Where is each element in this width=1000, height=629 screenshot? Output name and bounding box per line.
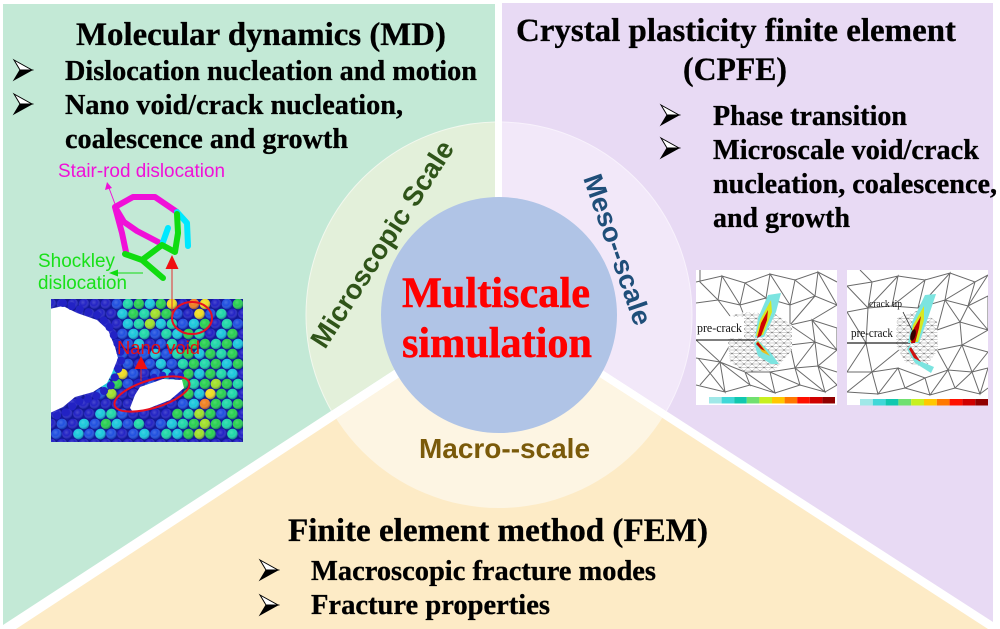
- bullet text: microscale void: nucleation, coalescence,: [713, 169, 997, 200]
- label: shockley dislocation: dislocation: [38, 273, 127, 294]
- panel: crystal plasticity finite element: [502, 3, 996, 622]
- bullet text: microscale void: Microscale void/crack: [713, 135, 979, 166]
- icon: bullet arrow: [661, 138, 679, 158]
- dislocation network: [115, 197, 188, 278]
- atom map: [49, 299, 245, 444]
- panel: finite element method: [16, 377, 988, 629]
- heading: molecular dynamics: Molecular dynamics (MD): [76, 17, 446, 53]
- label: stair-rod dislocation: Stair-rod dislocation: [58, 161, 225, 182]
- label: crack tip: crack tip: [869, 299, 902, 310]
- label: macro-scale: Macro--scale: [419, 433, 590, 464]
- figure: CPFE mesh left: [696, 270, 837, 405]
- label: microscopic scale: Microscopic Scale: [304, 135, 460, 353]
- title: multiscale simulation: Multiscale: [402, 270, 590, 317]
- bullet text: nano void: Nano void/crack nucleation,: [65, 90, 403, 121]
- label: shockley dislocation: Shockley: [38, 251, 115, 272]
- ellipse: void marker bottom: [111, 369, 193, 419]
- icon: bullet arrow: [260, 595, 278, 615]
- centre circle: [381, 197, 617, 433]
- panel: molecular dynamics: [3, 4, 495, 625]
- icon: bullet arrow: [14, 94, 32, 114]
- figure: atomistic dislocation snapshot: [38, 161, 245, 444]
- bullet text: microscale void: [713, 135, 997, 234]
- arrow: to nano void label: [134, 356, 148, 381]
- arrow: shockley pointer: [109, 270, 143, 276]
- icon: bullet arrow: [661, 105, 679, 125]
- colour scale: [860, 399, 988, 406]
- label: meso-scale: Meso--scale: [577, 170, 658, 329]
- label: shockley dislocation: [38, 251, 127, 294]
- arrow: void to dislocation: [166, 255, 178, 318]
- bullet text: dislocation: Dislocation nucleation and motion: [65, 56, 477, 87]
- stress plume: [907, 294, 936, 373]
- void: nano void: [130, 375, 184, 412]
- heading: CPFE: Crystal plasticity finite element: [516, 13, 956, 49]
- colour scale: [709, 397, 835, 404]
- label: pre-crack: pre-crack: [697, 320, 742, 335]
- label: pre-crack: pre-crack: [851, 325, 893, 340]
- title: multiscale simulation: [402, 270, 592, 367]
- arrow: stair-rod pointer: [105, 182, 115, 204]
- figure: CPFE mesh right: [847, 270, 988, 406]
- bullet text: nano void: coalescence and growth: [65, 124, 348, 155]
- icon: bullet arrow: [260, 560, 278, 580]
- heading: CPFE: [516, 13, 956, 88]
- icon: bullet arrow: [14, 60, 32, 80]
- heading: CPFE: (CPFE): [683, 52, 787, 88]
- stress plume: [754, 293, 781, 364]
- bullet text: fracture properties: Fracture properties: [311, 590, 550, 621]
- bullet text: microscale void: and growth: [713, 203, 850, 234]
- title: multiscale simulation: simulation: [402, 320, 592, 367]
- bullet text: fracture modes: Macroscopic fracture modes: [311, 556, 656, 587]
- bullet text: phase transition: Phase transition: [713, 101, 907, 132]
- label: nano void: Nano void: [117, 337, 200, 358]
- ellipse: void marker top: [172, 302, 212, 334]
- label: crack tip: [869, 299, 912, 330]
- heading: FEM: Finite element method (FEM): [288, 513, 708, 549]
- bullet text: nano void: [65, 90, 403, 155]
- void: crack region: [49, 303, 122, 418]
